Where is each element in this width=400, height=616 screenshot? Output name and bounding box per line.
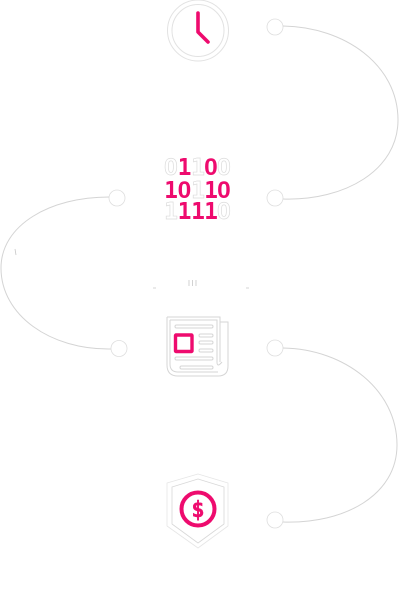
highlighted digits: 0 xyxy=(178,177,191,204)
highlighted digits xyxy=(164,154,231,225)
icon: newspaper xyxy=(167,317,228,376)
highlighted photo square xyxy=(176,335,192,352)
faint label marks xyxy=(15,249,249,288)
highlighted digits: 0 xyxy=(217,177,231,204)
highlighted digits: 0 xyxy=(204,154,218,181)
icon: shield with dollar coin: $ xyxy=(191,498,205,523)
outlined digits: 1 xyxy=(191,155,205,181)
highlighted digits: 1 xyxy=(204,199,218,225)
highlighted digits: 1 xyxy=(164,178,178,204)
connector: newspaper to shield xyxy=(267,340,397,528)
highlighted digits: 1 xyxy=(178,155,191,181)
outlined digits: 0 xyxy=(217,198,231,225)
icon: shield with dollar coin xyxy=(167,474,228,548)
outlined digits: 1 xyxy=(191,178,205,204)
connector: binary to newspaper xyxy=(1,190,127,356)
outlined digits xyxy=(164,154,231,225)
icon: binary digits xyxy=(164,154,231,225)
highlighted digits: 1 xyxy=(191,199,205,225)
outlined digits: 0 xyxy=(217,154,231,181)
outlined digits: 0 xyxy=(164,154,178,181)
outlined digits: 1 xyxy=(164,199,178,225)
highlighted digits: 1 xyxy=(204,178,218,204)
connector: clock to binary xyxy=(267,19,398,206)
icon: clock xyxy=(168,0,228,61)
highlighted digits: 1 xyxy=(178,199,191,225)
